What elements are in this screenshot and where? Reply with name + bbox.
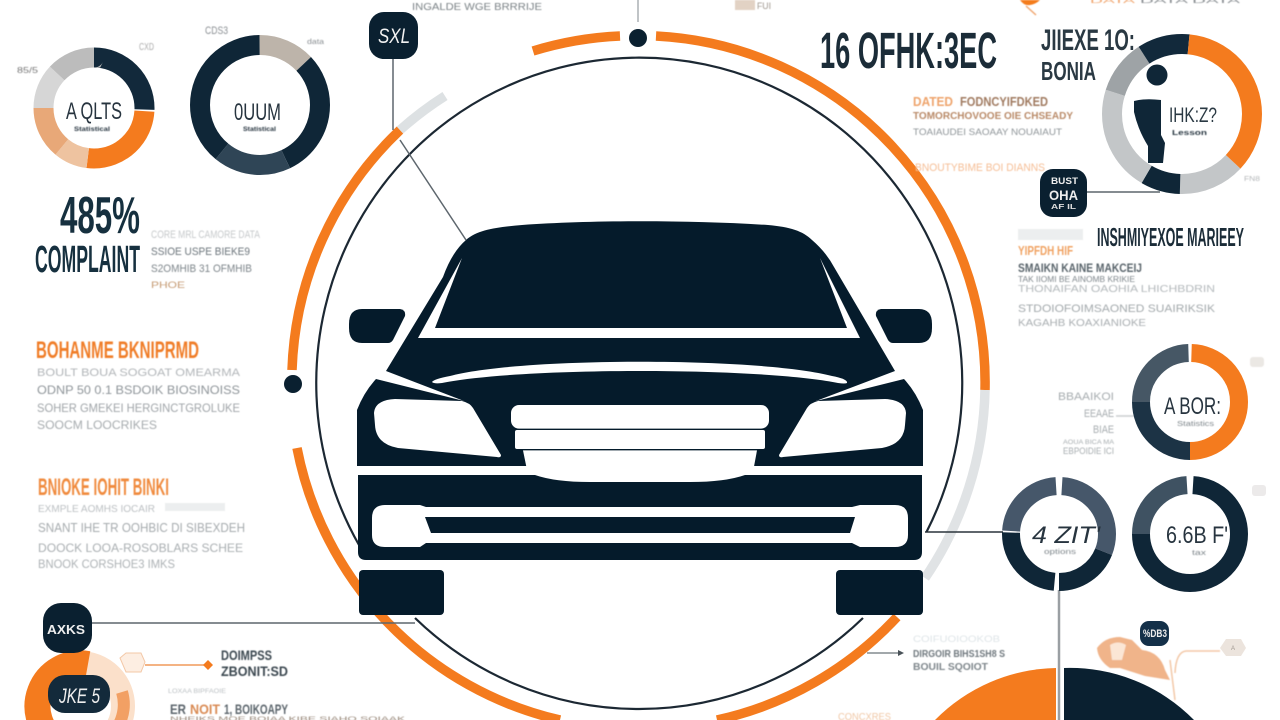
bottom left text block: ER	[170, 701, 186, 717]
hexagon tag	[1220, 639, 1246, 656]
donut: top centre-left	[200, 45, 320, 165]
donut: bottom middle	[1011, 486, 1107, 582]
badge: right: BUST	[1051, 176, 1079, 186]
donut top centre-left labels	[205, 25, 324, 133]
half pie: orange	[935, 668, 1056, 720]
car upper body	[357, 221, 923, 466]
right text block: THONAIFAN OAOHIA LHICHBDRIN	[1018, 284, 1215, 295]
donut bottom middle labels: 4 ZIT'	[1032, 522, 1102, 549]
icon: hexagon tag with arrow	[120, 653, 213, 672]
top caption: INGALDE WGE BRRRIJE	[412, 2, 542, 13]
donut top left labels: Statistical	[74, 127, 110, 133]
donut top right labels	[1169, 104, 1260, 183]
left text block two: DOOCK LOOA-ROSOBLARS SCHEE	[38, 541, 243, 555]
text: COMPLAINT	[35, 239, 140, 281]
big stat: 485% complaint: 485%	[60, 187, 140, 245]
hexagon tag: A	[1231, 646, 1235, 652]
donut top centre-left labels: data	[307, 39, 324, 46]
stat description text: S2OMHIB 31 OFMHIB	[151, 263, 252, 275]
right mid labels: EBPOIDIE ICI	[1063, 446, 1114, 456]
right text block: STDOIOFOIMSAONED SUAIRIKSIK	[1018, 303, 1216, 315]
bumper intake bar	[425, 517, 855, 533]
top small peach tag: FUI	[757, 1, 771, 11]
donut right middle label: A BOR:	[1164, 393, 1221, 420]
bottom left label: ZBONIT:SD	[221, 663, 288, 679]
left text block two: EXMPLE AOMHS IOCAIR	[38, 504, 155, 515]
right text block	[1018, 229, 1216, 329]
bottom centre-right text block: BOUIL SQOIOT	[913, 662, 988, 673]
stat description text: SSIOE USPE BIEKE9	[151, 246, 250, 258]
bottom left text block: LOXAA BIPFAOIE	[168, 689, 226, 695]
right text block: KAGAHB KOAXIANIOKE	[1018, 318, 1146, 329]
left text block two	[38, 474, 245, 571]
right-top text block: TOAIAUDEI SAOAAY NOUAIAUT	[913, 127, 1063, 137]
right mid labels: EEAAE	[1084, 408, 1114, 420]
right-top text block: FODNCYIFDKED	[960, 94, 1048, 109]
ring marker dot: left	[284, 375, 302, 393]
left text block one: SOOCM LOOCRIKES	[37, 418, 157, 432]
windshield outline	[418, 258, 860, 338]
grille middle bar	[515, 430, 765, 449]
segmented outer ring	[292, 36, 985, 720]
donut top left labels: 85/5	[17, 66, 39, 75]
donut top left labels	[17, 42, 154, 133]
badge: bottom left	[43, 603, 92, 653]
donut top right labels: IHK:Z?	[1169, 104, 1217, 127]
half pie: navy	[1064, 668, 1194, 720]
bottom left text block: 1, BOIKOAPY	[224, 701, 288, 717]
right text block: SMAIKN KAINE MAKCEIJ	[1018, 261, 1142, 275]
donut top right labels: FN8	[1244, 176, 1260, 183]
donut: right middle	[1141, 353, 1239, 451]
right-top text block	[913, 94, 1073, 174]
bottom left text block	[168, 689, 405, 720]
badge: right: OHA	[1049, 187, 1078, 203]
badge: bottom right small	[1140, 621, 1169, 646]
badge: top: SXL	[378, 25, 410, 48]
right-top text block: BNOUTYBIME BOI DIANNS	[915, 162, 1045, 174]
right-top text block: DATED	[913, 94, 953, 109]
left text block two: BNIOKE IOHIT BINKI	[38, 474, 169, 501]
left text block one	[36, 337, 241, 432]
right text block: TAK IIOMI BE AINOMB KRIKIE	[1018, 275, 1135, 284]
left mirror	[349, 309, 405, 343]
stat description text: CORE MRL CAMORE DATA	[151, 229, 261, 241]
donut: top right	[1112, 44, 1252, 184]
bottom left label	[221, 647, 288, 679]
badge: right	[1040, 169, 1087, 217]
donut top centre-left labels: CDS3	[205, 25, 228, 37]
right-top text block: TOMORCHOVOOE OIE CHSEADY	[913, 111, 1073, 122]
donut: bottom right	[1141, 485, 1239, 583]
left text block two: SNANT IHE TR OOHBIC DI SIBEXDEH	[38, 520, 245, 535]
right mirror	[876, 309, 932, 343]
left text block one: BOULT BOUA SOGOAT OMEARMA	[37, 367, 241, 379]
bottom left text block: NOIT	[190, 701, 220, 717]
donut top right labels: Lesson	[1172, 130, 1207, 137]
icon: person	[1134, 64, 1168, 163]
ring marker dot: top	[629, 0, 647, 47]
big stat: 485% complaint	[35, 187, 140, 281]
badge: top	[369, 12, 418, 59]
thin black ring	[316, 58, 962, 709]
donut right middle label	[1164, 393, 1221, 428]
hood crease	[432, 362, 847, 384]
badge: bottom left lower	[48, 675, 110, 713]
left text block one: SOHER GMEKEI HERGINCTGROLUKE	[37, 401, 240, 415]
bottom centre-right text block: COIFUOIOOKOB	[913, 634, 1000, 644]
grille top bar	[511, 405, 769, 429]
bumper intake strip	[372, 505, 908, 547]
top right orange fragment	[1020, 0, 1240, 15]
donut bottom middle labels: options	[1044, 549, 1077, 556]
left wheel	[359, 570, 444, 615]
right mid labels: BBAAIKOI	[1058, 391, 1114, 403]
left text block one: ODNP 50 0.1 BSDOIK BIOSINOISS	[37, 383, 240, 397]
right mid labels: AOUA BICA MA	[1063, 440, 1114, 446]
title: 16 OFHK:3EC	[820, 22, 997, 79]
right headlight	[779, 399, 906, 457]
bottom centre-right text block	[913, 634, 1005, 673]
donut top centre-left labels: Statistical	[243, 127, 276, 133]
callout connector lines	[92, 59, 1160, 720]
donut right middle label: Statistics	[1177, 421, 1215, 428]
donut bottom middle labels	[1032, 522, 1102, 556]
subtitle	[1041, 24, 1135, 86]
arrow to bottom text	[867, 650, 904, 656]
subtitle: JIIEXE 1O:	[1041, 24, 1135, 57]
right text block: YIPFDH HIF	[1018, 243, 1073, 258]
stat description text	[151, 229, 261, 290]
left headlight	[374, 399, 501, 457]
donut: top left	[44, 58, 144, 158]
right wheel	[836, 570, 923, 615]
badge: bottom right small: %DB3	[1143, 628, 1167, 640]
donut bottom right labels: 6.6B F'	[1166, 522, 1228, 549]
top small peach tag	[735, 0, 771, 11]
badge: bottom left lower: JKE 5	[58, 685, 100, 708]
icon: small peach figure	[1097, 637, 1220, 700]
donut top left labels: A QLTS	[66, 98, 122, 125]
right mid labels: BIAE	[1093, 424, 1114, 436]
badge: bottom left: AXKS	[47, 622, 85, 637]
stat description text: PHOE	[151, 280, 185, 290]
donut top centre-left labels: 0UUM	[234, 99, 281, 126]
lower bumper	[358, 475, 922, 560]
icon: bottom left orange ring	[37, 663, 124, 720]
donut top left labels: CXD	[139, 42, 154, 53]
subtitle: BONIA	[1041, 56, 1096, 86]
right mid labels	[1058, 357, 1264, 456]
donut bottom right labels: tax	[1192, 550, 1207, 557]
grille lower bar	[523, 450, 757, 482]
left text block two: BNOOK CORSHOE3 IMKS	[38, 557, 175, 571]
badge: right: AF IL	[1051, 204, 1077, 211]
donut bottom right labels	[1166, 485, 1266, 557]
bottom centre-right text block: DIRGOIR BIHS1SH8 S	[913, 649, 1005, 660]
bottom left label: DOIMPSS	[221, 647, 272, 663]
left text block one: BOHANME BKNIPRMD	[36, 337, 199, 364]
car front icon	[349, 221, 932, 615]
